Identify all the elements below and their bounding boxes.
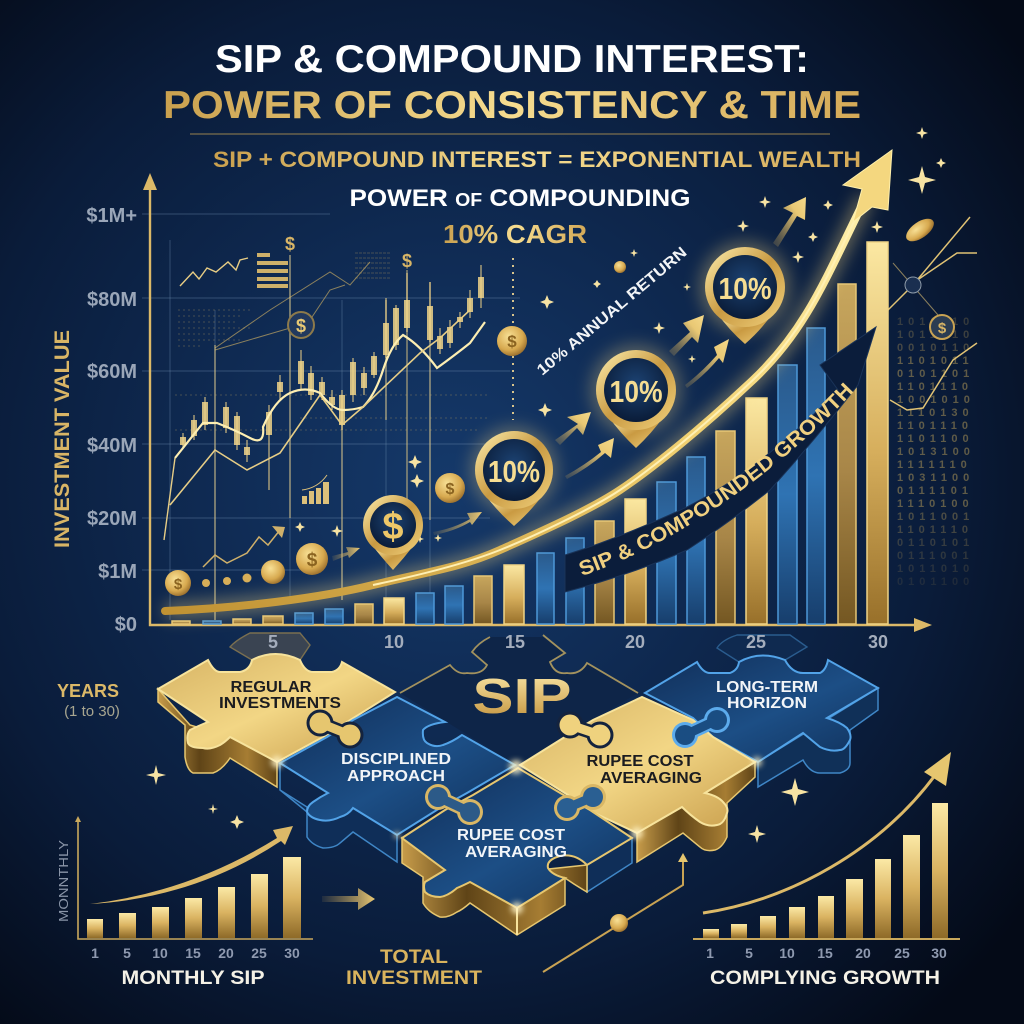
y axis tick labels: $20M (87, 508, 137, 530)
right side binary data panel: 1031100 (897, 472, 974, 484)
icon: dollar signs above chart: $ (285, 234, 295, 254)
puzzle: long-term horizon piece: LONG-TERM (716, 679, 818, 696)
y axis tick labels (86, 205, 137, 636)
puzzle: regular investments piece (158, 633, 395, 787)
small growth arrows (332, 197, 806, 561)
coins along growth path: $ (174, 576, 183, 593)
x axis tick labels: 15 (505, 632, 525, 652)
main chart background grid and candlesticks (142, 214, 520, 620)
mini chart: monthly SIP: 20 (218, 945, 234, 961)
y axis tick labels: $80M (87, 289, 137, 311)
right side line chart (888, 217, 977, 410)
right side binary data panel: 0111101 (897, 485, 973, 497)
right side binary data panel: 1101110 (897, 381, 973, 393)
main gold growth arrow (165, 150, 892, 611)
y axis tick labels: $40M (87, 435, 137, 457)
mini chart: monthly SIP: 25 (251, 945, 267, 961)
dim coin at right (930, 315, 954, 339)
puzzle: connectors (306, 707, 730, 825)
right side binary data panel: 0111001 (897, 550, 974, 562)
icon: dollar signs above chart: $ (402, 251, 412, 271)
puzzle: regular investments piece: INVESTMENTS (219, 695, 341, 712)
x axis tick labels: 30 (868, 632, 888, 652)
label: total investment (346, 947, 482, 989)
puzzle: rupee cost averaging gold piece: RUPEE COST (586, 753, 694, 770)
label: monthly SIP: MONTHLY SIP (122, 968, 265, 989)
subtitle formula: SIP + COMPOUND INTEREST = EXPONENTIAL WEALTH (213, 147, 861, 172)
puzzle: rupee cost averaging gold piece: AVERAGING (600, 770, 702, 787)
y axis title: INVESTMENT VALUE (51, 330, 74, 548)
right side binary data panel: 1101110 (897, 524, 973, 536)
puzzle: disciplined approach piece: DISCIPLINED (341, 751, 451, 768)
y axis tick labels: $1M (98, 561, 137, 583)
puzzle: disciplined approach piece (280, 697, 515, 862)
mini chart: monthly SIP: 30 (284, 945, 300, 961)
title: POWER OF CONSISTENCY & TIME (163, 84, 861, 127)
pin: 10 percent first (470, 426, 558, 526)
right side binary data panel: 1101011 (897, 355, 974, 367)
icon: chart coin: $ (296, 316, 306, 336)
right side binary data panel: 1111110 (897, 459, 972, 471)
navy banner arrow: SIP & compounded growth: SIP & COMPOUNDED GROWTH (579, 382, 853, 575)
puzzle: SIP centre piece (400, 635, 638, 765)
small trend line (203, 526, 285, 567)
mini chart: complying growth: 1 (706, 945, 714, 961)
annual return label: 10% ANNUAL RETURN (534, 244, 690, 379)
right side binary data panel: 0110101 (897, 537, 974, 549)
coins along growth path: $ (446, 481, 455, 498)
x axis tick labels: 10 (384, 632, 404, 652)
icon: mini bar chart (302, 475, 329, 504)
pin: 10 percent first: 10% (488, 454, 540, 489)
right side binary data panel: 1001010 (897, 394, 975, 406)
label: complying growth: COMPLYING GROWTH (710, 968, 940, 989)
right side binary data panel: 1011001 (897, 511, 974, 523)
right side binary data panel: 1013100 (897, 446, 975, 458)
mini chart: complying growth: 15 (817, 945, 833, 961)
puzzle: long-term horizon piece (645, 635, 878, 787)
heading: power of compounding: POWER OF COMPOUNDING (350, 185, 690, 212)
axis label: years: (1 to 30) (64, 703, 120, 720)
title divider (190, 133, 830, 135)
axis label: years (57, 681, 120, 720)
heading: 10% CAGR: 10% CAGR (443, 219, 587, 249)
right side binary data panel (897, 316, 975, 588)
puzzle: SIP centre piece: SIP (472, 670, 572, 724)
right side binary data panel: 0101101 (897, 368, 974, 380)
pin: dollar: $ (382, 506, 404, 548)
sparkles (146, 127, 946, 843)
mini chart: complying growth: 30 (931, 945, 947, 961)
puzzle: disciplined approach piece: APPROACH (347, 768, 445, 785)
label: total investment: INVESTMENT (346, 968, 482, 989)
puzzle: rupee cost averaging gold piece (520, 697, 755, 862)
dim coin at right: $ (938, 320, 947, 337)
x axis tick labels (268, 632, 888, 652)
right side binary data panel: 1110130 (897, 407, 974, 419)
pin: 10 percent third (699, 241, 791, 344)
puzzle: rupee cost averaging blue bottom piece: AVERAGING (465, 844, 567, 861)
pin: 10 percent third: 10% (718, 271, 772, 306)
coins along growth path (165, 214, 938, 596)
puzzle: corner glows (271, 756, 762, 914)
icon: chart coin (288, 312, 314, 338)
puzzle: regular investments piece: REGULAR (230, 679, 312, 696)
dotted vertical guide (512, 258, 514, 420)
right side binary data panel: 1011010 (897, 563, 974, 575)
label: total investment: TOTAL (380, 947, 448, 968)
right side binary data panel: 1011010 (897, 329, 974, 341)
coins along growth path: $ (507, 332, 517, 351)
mini chart: complying growth: 10 (779, 945, 795, 961)
x axis tick labels: 5 (268, 632, 278, 652)
navy banner arrow: SIP & compounded growth (564, 326, 877, 592)
icon: dollar signs above chart (285, 234, 412, 271)
x axis tick labels: 25 (746, 632, 766, 652)
right side binary data panel: 1101100 (897, 433, 974, 445)
pin: 10 percent second: 10% (610, 374, 662, 409)
y axis tick labels: $1M+ (86, 205, 137, 227)
right side binary data panel: 0010110 (897, 342, 974, 354)
y axis tick labels: $0 (115, 614, 137, 636)
puzzle: rupee cost averaging blue bottom piece: RUPEE COST (457, 827, 566, 844)
mini chart: complying growth: 20 (855, 945, 871, 961)
mini chart: monthly SIP: MONNTHLY (56, 840, 71, 922)
bar chart: gold and blue bars (172, 242, 888, 624)
pin: 10 percent second (590, 344, 682, 448)
title: SIP & COMPOUND INTEREST: (215, 38, 809, 81)
coins along growth path: $ (307, 550, 318, 571)
mini chart: complying growth (693, 752, 960, 961)
mini chart: complying growth: 25 (894, 945, 910, 961)
mini chart: monthly SIP: 10 (152, 945, 168, 961)
right side binary data panel: 0101100 (897, 576, 974, 588)
mini chart: monthly SIP (56, 816, 313, 961)
coin connector arrow (543, 853, 688, 972)
axes (143, 173, 932, 632)
mini chart: monthly SIP: 1 (91, 945, 99, 961)
arrow: monthly SIP to total investment (322, 888, 375, 910)
x axis tick labels: 20 (625, 632, 645, 652)
y axis tick labels: $60M (87, 361, 137, 383)
mini chart: monthly SIP: 15 (185, 945, 201, 961)
mini chart: monthly SIP: 5 (123, 945, 131, 961)
puzzle: rupee cost averaging blue bottom piece (402, 768, 632, 935)
right side binary data panel: 1010110 (897, 316, 974, 328)
axis label: years: YEARS (57, 681, 119, 701)
right side binary data panel: 1101110 (897, 420, 973, 432)
mini chart: complying growth: 5 (745, 945, 753, 961)
pin: dollar (363, 495, 423, 570)
right side binary data panel: 1110100 (897, 498, 974, 510)
puzzle: long-term horizon piece: HORIZON (727, 695, 807, 712)
title (163, 38, 861, 127)
